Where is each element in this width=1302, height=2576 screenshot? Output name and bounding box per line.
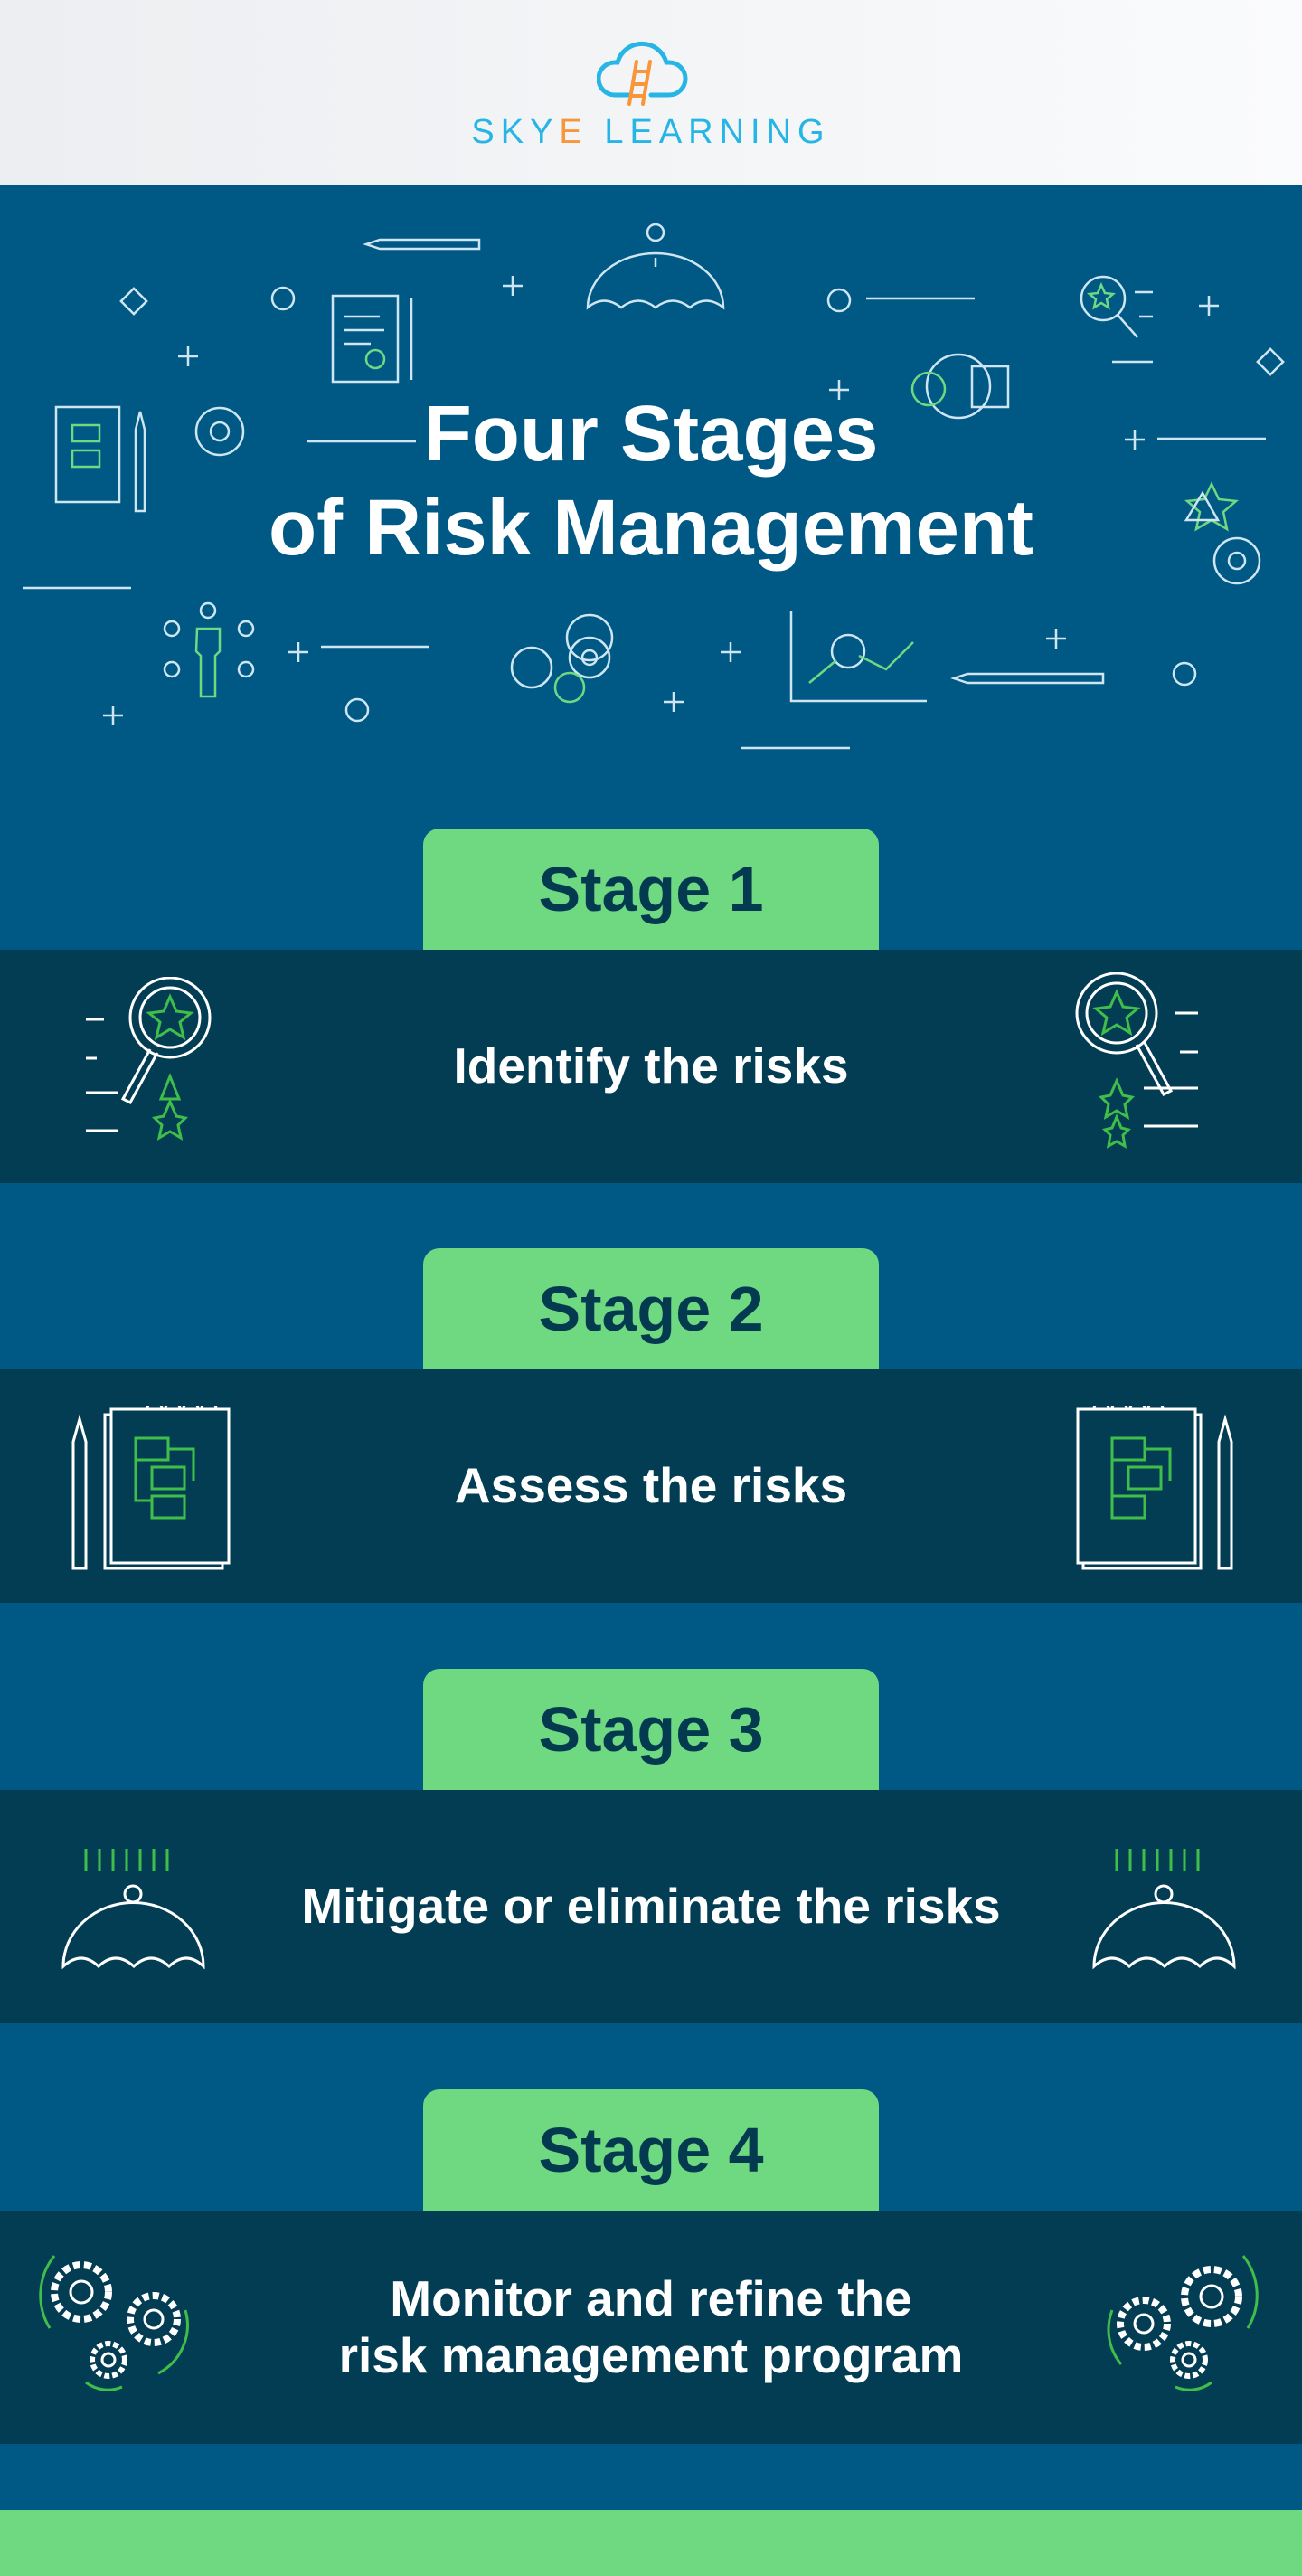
stage 1 band <box>0 950 1302 1183</box>
label: Mitigate or eliminate the risks <box>301 1878 1001 1934</box>
label: risk management program <box>339 2327 963 2383</box>
document <box>333 296 398 382</box>
title <box>269 390 1033 572</box>
title: of Risk Management <box>269 484 1033 572</box>
stage 1 tab <box>423 829 879 950</box>
stage 3 tab <box>423 1669 879 1790</box>
stage 4 band <box>0 2211 1302 2444</box>
stage 2 tab: Stage 2 <box>539 1274 763 1344</box>
magnifier <box>1081 277 1125 320</box>
title: Four Stages <box>424 390 878 478</box>
icon: magnifier right <box>1076 972 1198 1149</box>
refresh <box>927 355 990 418</box>
gears <box>196 408 243 455</box>
chess <box>201 603 215 618</box>
header <box>0 0 1302 185</box>
footer bar <box>0 2510 1302 2576</box>
pens <box>366 240 1103 683</box>
logo text: SKYE LEARNING <box>471 113 831 151</box>
stage 3 band <box>0 1790 1302 2023</box>
chart <box>791 611 927 701</box>
logo <box>471 42 831 151</box>
stage 2 band <box>0 1369 1302 1603</box>
icon: umbrella left <box>61 1849 204 1970</box>
icon: notepad right <box>1076 1406 1233 1570</box>
stage 3 tab: Stage 3 <box>539 1694 763 1765</box>
notepad <box>56 407 119 502</box>
stage 1 tab: Stage 1 <box>539 854 763 924</box>
icon: cloud with ladder <box>597 42 687 106</box>
label: Assess the risks <box>455 1457 847 1513</box>
icon: magnifier left <box>86 977 212 1141</box>
hero decorations <box>23 223 1285 749</box>
umbrella <box>588 253 723 308</box>
stars <box>1187 484 1236 529</box>
icon: umbrella right <box>1092 1849 1235 1970</box>
stage 2 tab <box>423 1248 879 1369</box>
icon: gears left <box>39 2255 189 2391</box>
label: Identify the risks <box>453 1037 849 1094</box>
label <box>339 2270 963 2383</box>
icon: gears right <box>1107 2255 1259 2391</box>
icon: notepad left <box>72 1406 230 1570</box>
stage 4 tab: Stage 4 <box>539 2115 763 2185</box>
label: Monitor and refine the <box>390 2270 912 2326</box>
stage 4 tab <box>423 2089 879 2211</box>
